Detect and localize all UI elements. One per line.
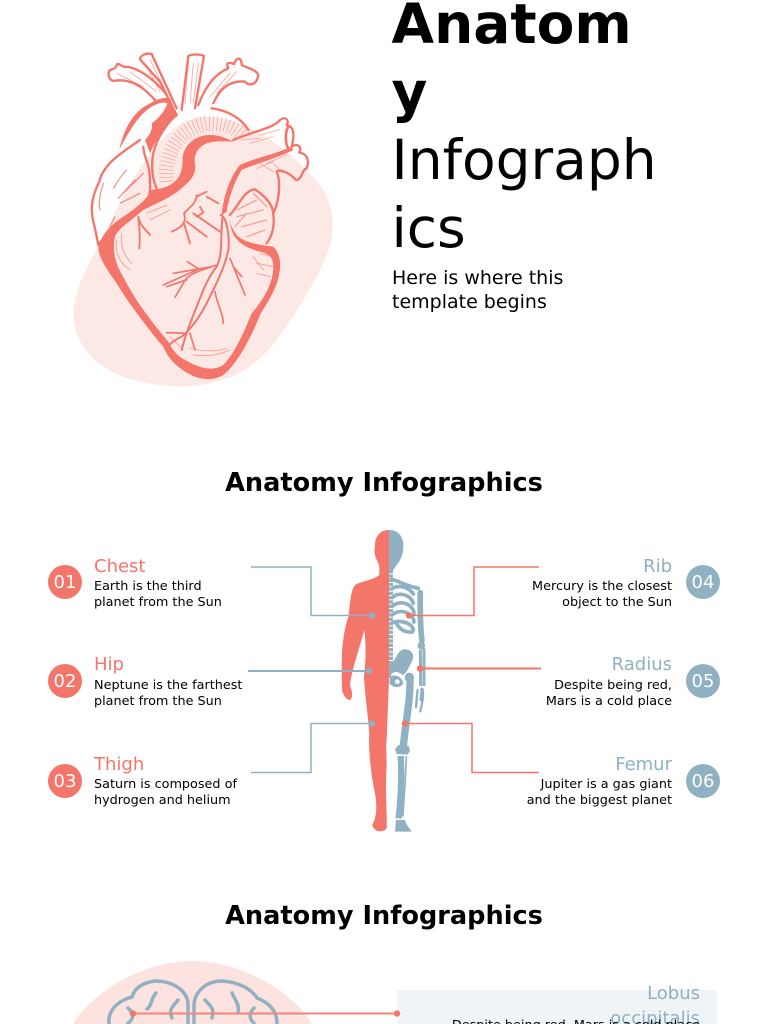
ventricle hatching bbox=[116, 205, 273, 356]
title: Infograph bbox=[392, 128, 657, 192]
connector: radius bbox=[420, 668, 541, 670]
left vessel bbox=[109, 64, 170, 100]
vessel hatching bbox=[117, 60, 237, 103]
text: Neptune is the farthest bbox=[94, 678, 242, 693]
artery band bbox=[222, 147, 293, 215]
text: Earth is the third bbox=[94, 579, 202, 594]
aortic arch bbox=[152, 108, 248, 188]
title: y bbox=[392, 60, 427, 124]
hand bbox=[416, 689, 423, 711]
text: Femur bbox=[615, 754, 672, 775]
text: Rib bbox=[643, 556, 672, 577]
left auricle shadow bbox=[119, 98, 177, 153]
coronary vessels upper bbox=[138, 192, 220, 248]
second vessel bbox=[140, 54, 177, 115]
elbow bbox=[410, 634, 432, 657]
text: Mercury is the closest bbox=[532, 579, 672, 594]
panel label bbox=[610, 983, 700, 1024]
small chamber bbox=[230, 189, 274, 243]
knee bbox=[395, 745, 410, 755]
central and outer wall bbox=[98, 135, 280, 379]
connector: hip bbox=[248, 670, 369, 672]
pulmonary artery bbox=[233, 118, 308, 213]
text: Hip bbox=[94, 654, 124, 675]
subtitle bbox=[392, 267, 563, 313]
heading: section 1: Anatomy Infographics bbox=[225, 468, 543, 498]
text: 02 bbox=[54, 671, 76, 692]
blob behind brain bbox=[73, 961, 312, 1024]
text: 04 bbox=[692, 572, 714, 593]
title: ics bbox=[392, 196, 466, 260]
text: hydrogen and helium bbox=[94, 792, 231, 808]
blob behind heart bbox=[74, 117, 333, 386]
item 05: radius bbox=[546, 654, 720, 708]
item 01: chest bbox=[48, 556, 222, 610]
body half bbox=[342, 530, 389, 831]
bones bbox=[391, 570, 424, 818]
text: Saturn is composed of bbox=[94, 777, 237, 792]
text: planet from the Sun bbox=[94, 594, 222, 610]
text: 01 bbox=[54, 572, 76, 593]
text: planet from the Sun bbox=[94, 694, 222, 708]
subtitle: template begins bbox=[392, 291, 547, 313]
text: object to the Sun bbox=[562, 594, 672, 610]
text: Chest bbox=[94, 556, 146, 577]
text: Radius bbox=[612, 654, 672, 675]
femur bbox=[403, 677, 410, 747]
item 04: rib bbox=[532, 556, 720, 610]
connector: thigh bbox=[251, 724, 372, 772]
text: and the biggest planet bbox=[527, 792, 672, 808]
text: Thigh bbox=[94, 754, 144, 775]
connector: rib bbox=[409, 567, 539, 616]
spine bbox=[385, 570, 397, 664]
left atrium outline bbox=[92, 140, 150, 245]
item 02: hip bbox=[48, 654, 242, 708]
panel: lobus occipitalis bbox=[397, 990, 717, 1024]
text: Despite being red, bbox=[554, 678, 672, 693]
tibia bbox=[399, 756, 401, 818]
heading: section 2: Anatomy Infographics bbox=[225, 901, 543, 931]
arch hatching bbox=[166, 123, 242, 182]
thick heart walls bbox=[98, 98, 293, 379]
panel label: Lobus bbox=[647, 983, 700, 1004]
illustration: anatomical heart bbox=[74, 52, 333, 386]
forearm bbox=[420, 648, 424, 686]
middle vessel bbox=[182, 54, 204, 110]
text: 03 bbox=[54, 771, 76, 792]
item 03: thigh bbox=[48, 754, 238, 808]
connector: chest bbox=[251, 567, 372, 616]
text: Mars is a cold place bbox=[546, 694, 672, 708]
marker dots bbox=[366, 612, 423, 727]
pelvis bbox=[389, 649, 413, 678]
fibula bbox=[403, 756, 406, 817]
subtitle: Here is where this bbox=[392, 267, 563, 289]
text: 05 bbox=[692, 671, 714, 692]
ribs bbox=[392, 579, 418, 632]
right vessel bbox=[198, 59, 258, 105]
text: 06 bbox=[692, 771, 714, 792]
skeleton half bbox=[389, 530, 413, 832]
text: Jupiter is a gas giant bbox=[541, 777, 672, 792]
humerus bbox=[420, 593, 422, 641]
connector: femur bbox=[405, 724, 539, 772]
item 06: femur bbox=[527, 754, 720, 808]
main descending artery bbox=[168, 215, 229, 350]
brain outline bbox=[109, 981, 277, 1023]
title bbox=[392, 0, 657, 260]
foot bbox=[395, 820, 412, 832]
